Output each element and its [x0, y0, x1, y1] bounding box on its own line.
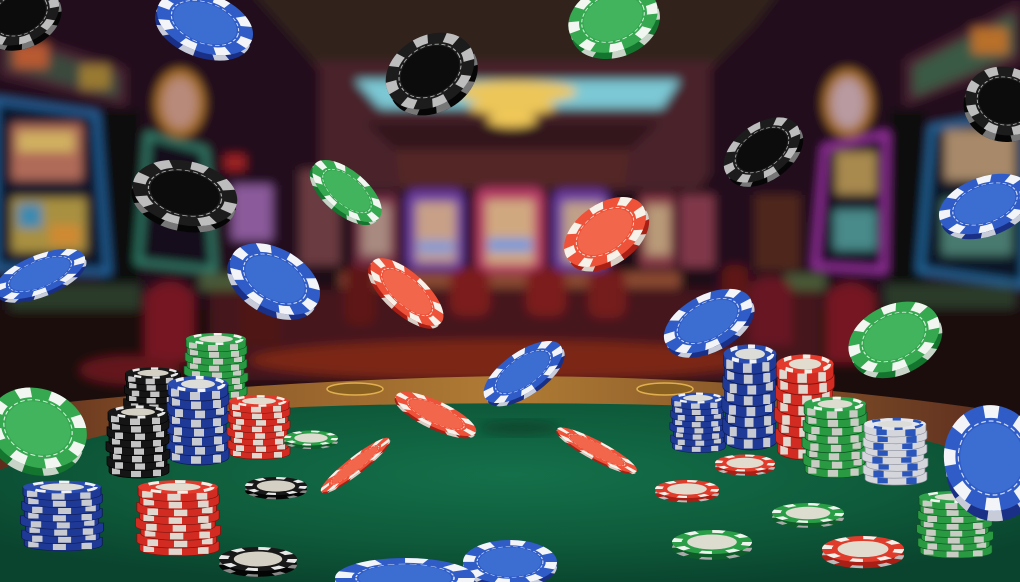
sign top right — [905, 2, 1020, 106]
wall pillar left — [100, 110, 140, 300]
right wall — [710, 0, 1020, 300]
right slot machine — [815, 134, 886, 270]
bar counter — [340, 272, 680, 288]
wall pillar right — [890, 110, 925, 300]
ceiling — [240, 0, 790, 70]
red chips — [551, 183, 662, 286]
floor — [210, 290, 820, 380]
chips lying on table — [219, 430, 904, 582]
poker table — [0, 376, 1020, 582]
consoles — [10, 284, 140, 310]
blue chips — [146, 0, 262, 73]
left slot machine — [0, 100, 108, 272]
round signs — [155, 69, 205, 137]
left wall — [0, 0, 320, 300]
far right slot machine — [920, 112, 1020, 285]
sign top left — [0, 28, 126, 106]
cup holders — [327, 383, 383, 395]
chip stacks, right group — [670, 345, 993, 558]
chip stacks, left group — [20, 333, 291, 556]
far machines — [300, 170, 340, 265]
ceiling tiers — [365, 122, 660, 150]
chandelier — [453, 81, 577, 127]
black chips — [0, 0, 72, 63]
green felt — [0, 403, 1020, 582]
green chips — [558, 0, 670, 71]
chip shadow — [480, 420, 560, 436]
ceiling light panel — [355, 80, 680, 108]
chairs — [450, 268, 490, 316]
table rim — [0, 376, 1020, 480]
second left slot machine — [138, 135, 214, 270]
